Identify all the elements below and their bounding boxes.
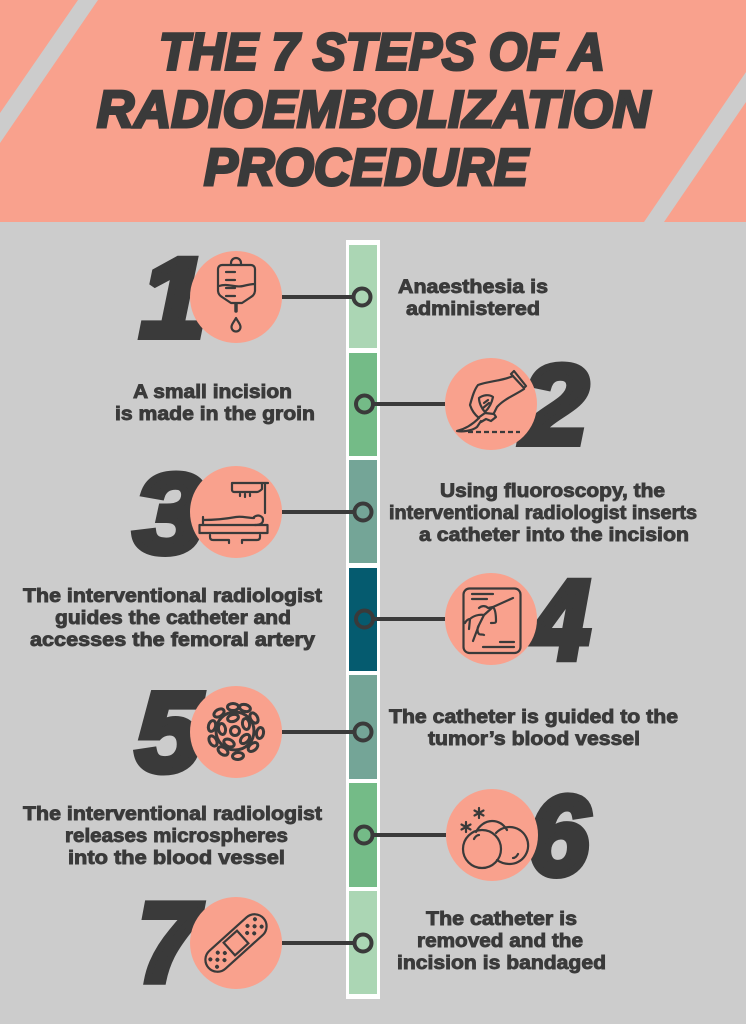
circle 6 bbox=[446, 789, 538, 881]
text 4: The interventional radiologist bbox=[23, 585, 323, 607]
text 2: is made in the groin bbox=[115, 403, 315, 425]
connector 3 bbox=[282, 504, 372, 520]
text 6 bbox=[23, 803, 323, 869]
text 4: guides the catheter and bbox=[55, 607, 291, 629]
icon: IV drip bag bbox=[218, 258, 255, 332]
step 3 bbox=[134, 452, 697, 576]
circle 7 bbox=[190, 897, 282, 989]
connector 2 bbox=[356, 396, 445, 412]
text 7 bbox=[397, 908, 606, 974]
title: THE 7 STEPS OF A bbox=[159, 24, 605, 82]
connector 6 bbox=[356, 826, 446, 844]
number 6: 6 bbox=[528, 774, 590, 898]
text 2: A small incision bbox=[133, 381, 292, 403]
circle 1 bbox=[190, 251, 282, 343]
icon: tumor cell bbox=[207, 703, 264, 760]
text 7: removed and the bbox=[417, 930, 583, 952]
text 3: Using fluoroscopy, the bbox=[440, 480, 665, 502]
text 5 bbox=[389, 706, 678, 750]
title bbox=[97, 24, 651, 197]
circle 5 bbox=[190, 686, 282, 778]
icon: microspheres bbox=[462, 808, 528, 868]
text 4 bbox=[23, 585, 323, 651]
text 3 bbox=[389, 480, 697, 546]
header banner bbox=[0, 0, 746, 222]
number 5: 5 bbox=[136, 670, 203, 795]
connector 1 bbox=[282, 288, 370, 306]
circle 3 bbox=[190, 466, 282, 558]
text 1: administered bbox=[406, 298, 540, 320]
number 7: 7 bbox=[138, 880, 203, 1005]
step 6 bbox=[23, 774, 590, 898]
number 4: 4 bbox=[530, 558, 590, 682]
icon: patient on fluoroscopy table bbox=[200, 483, 268, 543]
icon: hand with scalpel bbox=[457, 371, 526, 432]
connector 5 bbox=[282, 724, 372, 740]
text 5: tumor’s blood vessel bbox=[428, 728, 640, 750]
text 6: releases microspheres bbox=[65, 825, 288, 847]
circle 4 bbox=[445, 573, 537, 665]
text 6: into the blood vessel bbox=[68, 847, 285, 869]
text 1 bbox=[398, 276, 548, 320]
text 3: a catheter into the incision bbox=[419, 524, 689, 546]
text 5: The catheter is guided to the bbox=[389, 706, 678, 728]
text 3: interventional radiologist inserts bbox=[389, 502, 697, 524]
text 7: The catheter is bbox=[426, 908, 577, 930]
step 1 bbox=[140, 236, 548, 360]
circle 2 bbox=[445, 358, 537, 450]
step 2 bbox=[115, 342, 588, 468]
number 3: 3 bbox=[134, 452, 204, 576]
text 1: Anaesthesia is bbox=[398, 276, 548, 298]
text 6: The interventional radiologist bbox=[23, 803, 323, 825]
central timeline bar bbox=[346, 240, 380, 999]
number 1: 1 bbox=[140, 236, 206, 360]
text 7: incision is bandaged bbox=[397, 952, 606, 974]
text 2 bbox=[115, 381, 315, 425]
text 4: accesses the femoral artery bbox=[30, 629, 315, 651]
step 5 bbox=[136, 670, 678, 795]
connector 7 bbox=[282, 934, 372, 952]
title: PROCEDURE bbox=[204, 139, 529, 197]
step 4 bbox=[23, 558, 590, 682]
number 2: 2 bbox=[520, 342, 588, 468]
icon: angiogram x-ray bbox=[464, 588, 520, 653]
icon: bandage bbox=[200, 909, 272, 977]
step 7 bbox=[138, 880, 606, 1005]
connector 4 bbox=[356, 610, 445, 628]
title: RADIOEMBOLIZATION bbox=[97, 81, 651, 139]
